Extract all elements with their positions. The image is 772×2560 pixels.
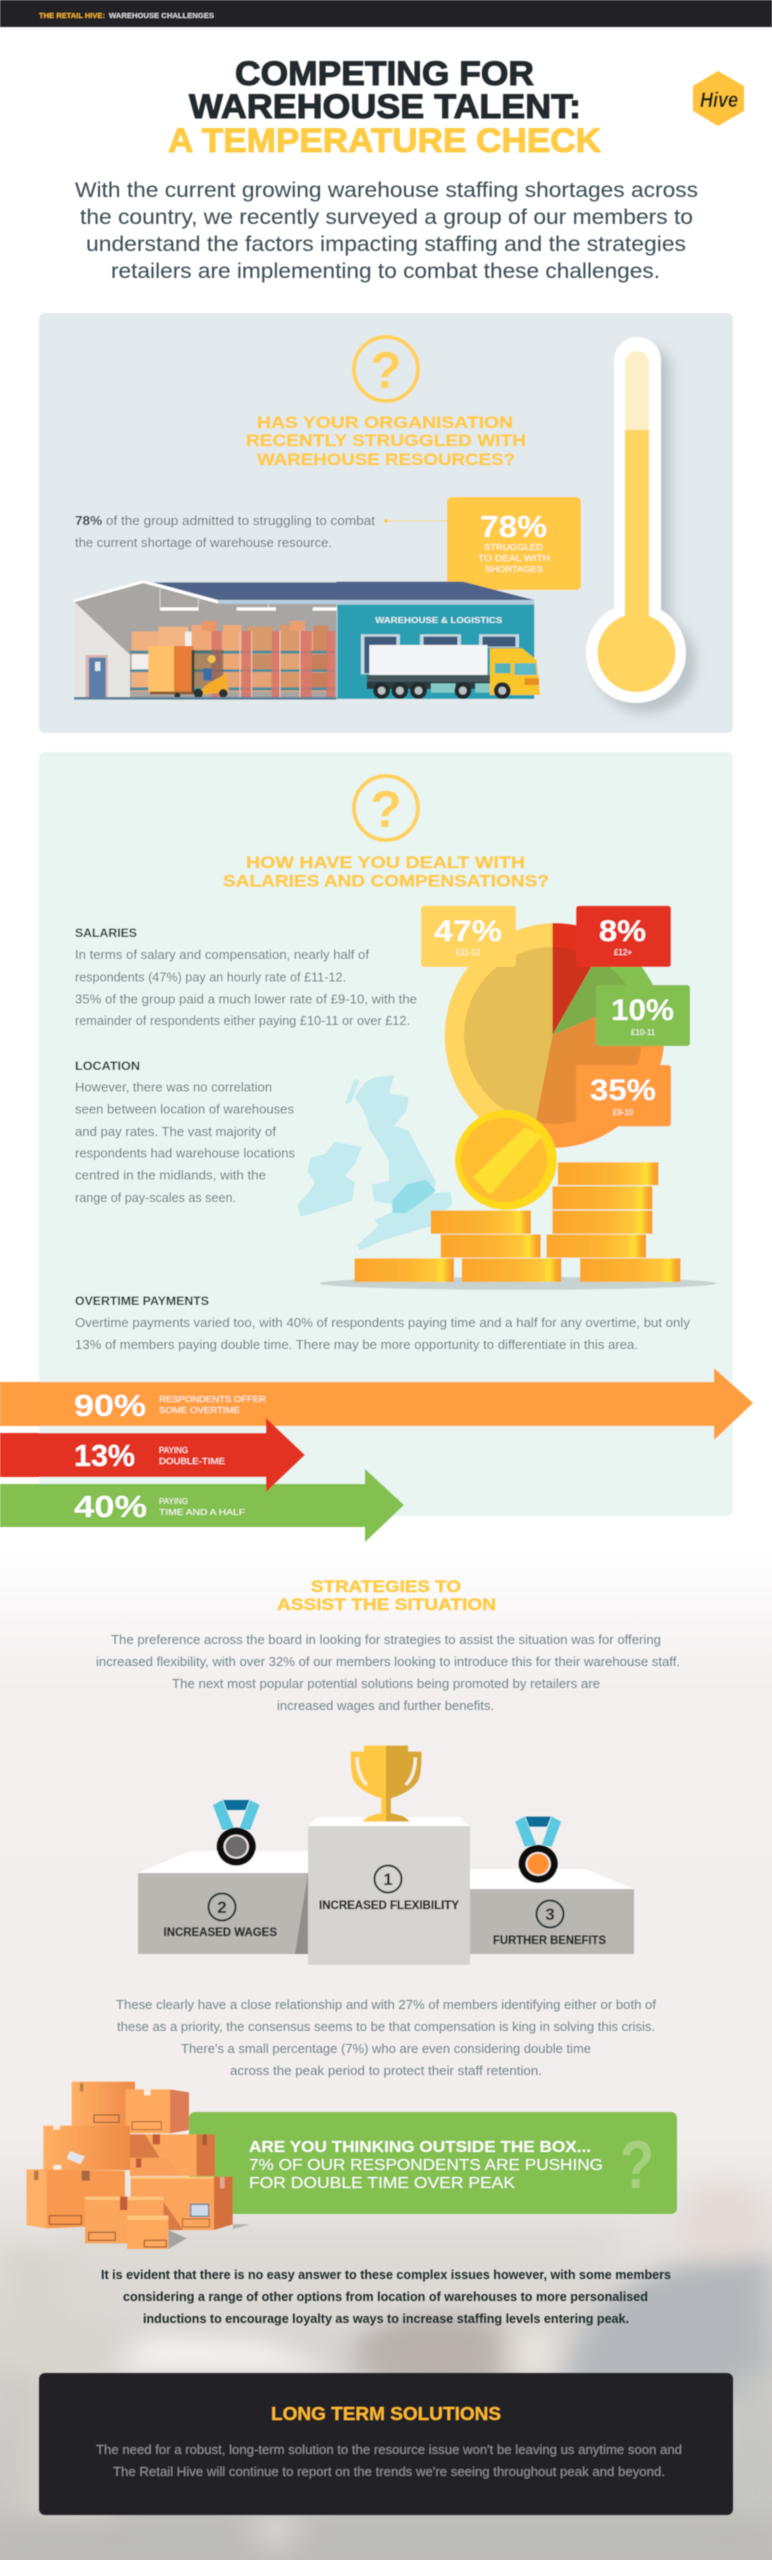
podium step: third place [470, 1869, 634, 1954]
pie label: 47% [421, 906, 516, 967]
pie label: 47%: £11-12 [456, 948, 481, 957]
podium step: second place [138, 1851, 308, 1954]
icon: question mark circle [354, 776, 418, 840]
podium step: third place: 3 [545, 1905, 555, 1924]
arrow: 40% time and a half: 40% [74, 1489, 147, 1524]
text: overtime payments: 13% of members paying double time. There may be more opportunity to differentiate in this area. [75, 1338, 638, 1352]
text: salaries: respondents (47%) pay an hourly rate of £11-12. [75, 970, 346, 984]
text: close relationship: There's a small percentage (7%) who are even considering double time [181, 2042, 591, 2056]
podium step: second place: 2 [217, 1898, 227, 1917]
callout: 78%: TO DEAL WITH [478, 554, 550, 563]
arrow: 90% some overtime: 90% [74, 1388, 146, 1423]
text: 78% struggled [75, 514, 376, 550]
callout: outside the box: ? [620, 2127, 654, 2203]
map: United Kingdom and Ireland [298, 1076, 452, 1251]
intro text: retailers are implementing to combat these challenges. [111, 260, 660, 283]
podium step: first place: 1 [383, 1870, 393, 1889]
pie chart [445, 923, 664, 1148]
text: salaries: SALARIES [75, 926, 137, 940]
callout: 78%: 78% [480, 509, 547, 544]
warehouse illustration [74, 582, 540, 700]
panel heading: WAREHOUSE RESOURCES? [257, 450, 515, 469]
panel: long term solutions [39, 2373, 733, 2515]
text: 78% struggled: 78% of the group admitted to struggling to combat [75, 514, 376, 528]
panel text: The Retail Hive will continue to report on the trends we're seeing throughout peak and beyond. [113, 2465, 665, 2479]
top bar: THE RETAIL HIVE: [39, 13, 105, 20]
text: salaries: In terms of salary and compensation, nearly half of [75, 948, 370, 962]
top bar [0, 0, 772, 27]
callout: outside the box [189, 2112, 677, 2214]
icon: silver medal [213, 1800, 260, 1866]
callout: 78%: STRUGGLED [484, 543, 543, 552]
panel heading: RECENTLY STRUGGLED WITH [246, 431, 526, 450]
arrow: 13% double time: DOUBLE-TIME [159, 1457, 225, 1466]
arrow: 90% some overtime [0, 1368, 753, 1440]
text: location: However, there was no correlation [75, 1080, 272, 1094]
panel heading: HOW HAVE YOU DEALT WITH [246, 853, 525, 872]
arrow: 40% time and a half: PAYING [159, 1497, 188, 1506]
icon: question mark circle: ? [370, 781, 402, 839]
pie label: 35%: 35% [590, 1074, 656, 1107]
intro text: With the current growing warehouse staffing shortages across [75, 179, 698, 202]
warehouse illustration: WAREHOUSE & LOGISTICS [375, 616, 502, 625]
podium step: second place: INCREASED WAGES [164, 1927, 277, 1939]
text: strategies intro: The next most popular potential solutions being promoted by retailers are [172, 1677, 600, 1691]
text: strategies intro [96, 1633, 680, 1713]
arrow: 13% double time: PAYING [159, 1446, 188, 1455]
text: salaries: 35% of the group paid a much lower rate of £9-10, with the [75, 992, 417, 1006]
text: conclusion: It is evident that there is no easy answer to these complex issues however, with some members [101, 2267, 671, 2282]
text: strategies intro: increased flexibility, with over 32% of our members looking to introduce this for their warehouse staff. [96, 1655, 680, 1669]
heading: strategies: ASSIST THE SITUATION [277, 1595, 496, 1614]
big coin [455, 1110, 557, 1210]
pie label: 35%: £9-10 [613, 1108, 634, 1117]
pie label: 8%: £12+ [614, 948, 632, 957]
illustration: cardboard boxes [27, 2082, 250, 2249]
pie label: 47%: 47% [434, 915, 502, 948]
pie label: 10%: £10-11 [631, 1028, 656, 1037]
title [168, 55, 601, 160]
intro text [75, 179, 698, 283]
panel: salaries and compensation [39, 752, 733, 1516]
arrow: 40% time and a half [0, 1469, 404, 1542]
text: location: LOCATION [75, 1059, 140, 1073]
text: conclusion: inductions to encourage loyalty as ways to increase staffing levels entering peak. [143, 2311, 629, 2326]
text: close relationship: these as a priority, the consensus seems to be that compensation is king in solving this crisis. [117, 2020, 655, 2034]
pie label: 8%: 8% [599, 915, 646, 948]
arrow: 13% double time [0, 1418, 305, 1492]
panel: warehouse resources [39, 313, 733, 733]
podium step: first place: INCREASED FLEXIBILITY [319, 1900, 459, 1912]
top bar: WAREHOUSE CHALLENGES [109, 13, 214, 20]
text: location: respondents had warehouse locations [75, 1147, 295, 1161]
panel heading: SALARIES AND COMPENSATIONS? [223, 872, 549, 890]
callout: outside the box: 7% OF OUR RESPONDENTS ARE PUSHING [249, 2157, 603, 2174]
lower page background with faded photo [0, 1545, 772, 2560]
panel heading [246, 413, 526, 469]
title: COMPETING FOR [235, 55, 534, 93]
pie label: 8% [576, 906, 671, 967]
heading: strategies: STRATEGIES TO [311, 1577, 461, 1596]
text: strategies intro: The preference across the board in looking for strategies to assist the situation was for offering [111, 1633, 661, 1647]
connector line [384, 519, 447, 523]
text: salaries [75, 926, 417, 1028]
icon: question mark circle [354, 337, 418, 401]
icon: bronze medal [515, 1817, 561, 1883]
text: overtime payments: Overtime payments varied too, with 40% of respondents paying time and a half for any overtime, but only [75, 1316, 691, 1330]
icon: question mark circle: ? [370, 342, 402, 400]
panel heading: LONG TERM SOLUTIONS [271, 2404, 501, 2424]
pie label: 35% [576, 1065, 671, 1126]
pie label: 10% [596, 985, 690, 1046]
pie label: 10%: 10% [611, 994, 674, 1027]
podium [138, 1746, 634, 1965]
text: location: seen between location of warehouses [75, 1103, 294, 1117]
heading: strategies [277, 1577, 496, 1614]
text: close relationship [116, 1998, 657, 2078]
text: overtime payments: OVERTIME PAYMENTS [75, 1294, 209, 1308]
text: 78% struggled: the current shortage of warehouse resource. [75, 536, 332, 550]
arrow: 40% time and a half: TIME AND A HALF [159, 1508, 245, 1517]
thermometer [586, 337, 696, 713]
podium step: third place: FURTHER BENEFITS [493, 1935, 606, 1947]
text: close relationship: These clearly have a close relationship and with 27% of members identifying either or both of [116, 1998, 657, 2012]
text: strategies intro: increased wages and further benefits. [277, 1699, 494, 1713]
text: conclusion [101, 2267, 671, 2326]
text: overtime payments [75, 1294, 691, 1352]
text: location: range of pay-scales as seen. [75, 1191, 236, 1205]
arrow: 13% double time: 13% [74, 1438, 135, 1473]
podium step: first place [308, 1817, 470, 1965]
text: location [75, 1059, 295, 1205]
panel text: The need for a robust, long-term solution to the resource issue won't be leaving us anytime soon and [96, 2443, 682, 2457]
arrow: 90% some overtime: RESPONDENTS OFFER [159, 1395, 266, 1404]
callout: outside the box: ARE YOU THINKING OUTSIDE THE BOX... [249, 2139, 591, 2156]
title: A TEMPERATURE CHECK [168, 122, 601, 160]
panel heading [223, 853, 549, 890]
text: location: centred in the midlands, with the [75, 1169, 266, 1183]
callout: 78% [447, 497, 581, 590]
panel heading: HAS YOUR ORGANISATION [257, 413, 513, 432]
intro text: understand the factors impacting staffing and the strategies [86, 233, 686, 256]
text: location: and pay rates. The vast majority of [75, 1125, 277, 1139]
intro text: the country, we recently surveyed a group of our members to [80, 206, 693, 229]
callout: 78%: SHORTAGES [485, 565, 543, 574]
icon: hive logo [693, 71, 744, 126]
title: WAREHOUSE TALENT: [189, 88, 581, 126]
arrow: 90% some overtime: SOME OVERTIME [159, 1406, 240, 1415]
coin stacks [320, 1162, 716, 1290]
callout: outside the box: FOR DOUBLE TIME OVER PEAK [249, 2175, 515, 2192]
icon: hive logo: Hive [700, 89, 738, 112]
panel text [96, 2443, 682, 2479]
text: close relationship: across the peak period to protect their staff retention. [230, 2064, 542, 2078]
text: conclusion: considering a range of other options from location of warehouses to more personalised [123, 2289, 648, 2304]
text: salaries: remainder of respondents either paying £10-11 or over £12. [75, 1014, 410, 1028]
icon: trophy [351, 1746, 421, 1822]
